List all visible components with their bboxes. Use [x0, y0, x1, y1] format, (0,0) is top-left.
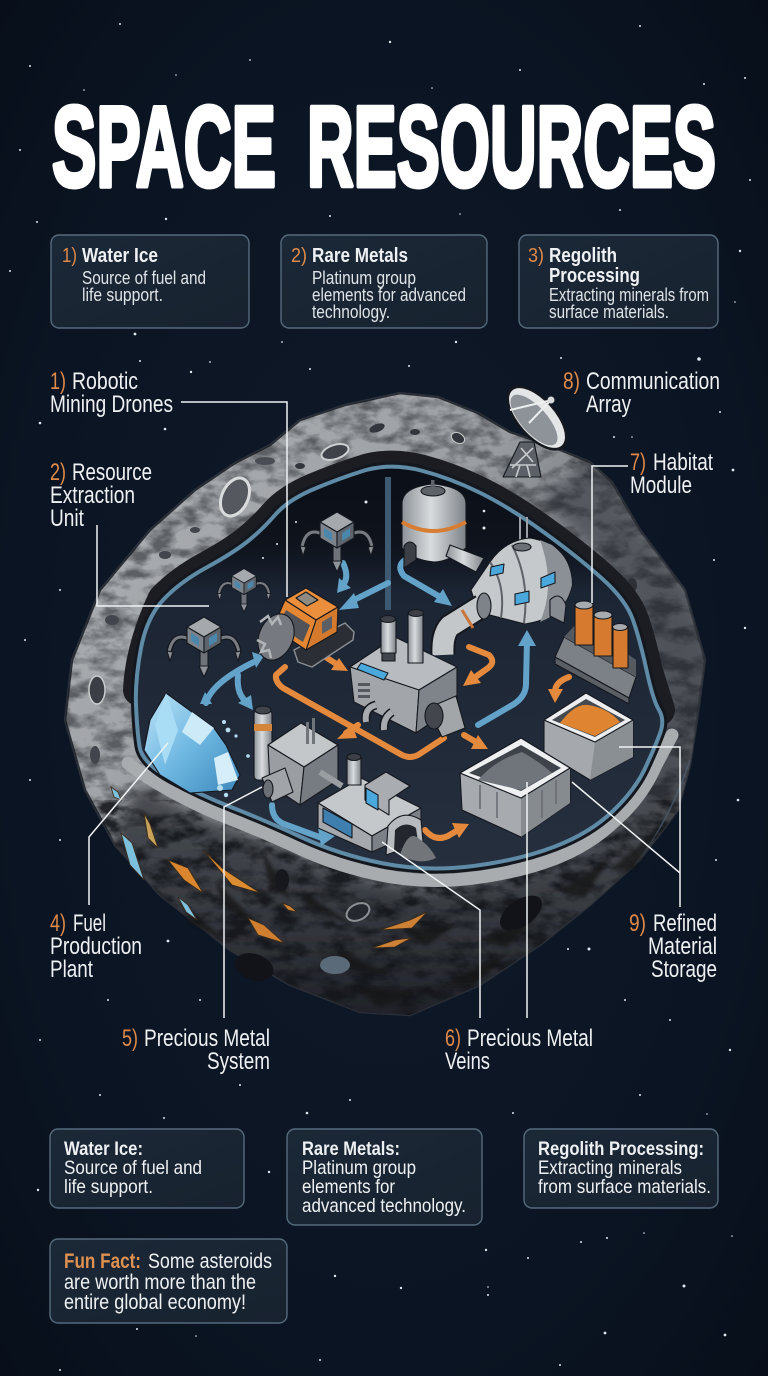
label 1: robotic mining drones: Robotic	[72, 368, 138, 395]
label 4: fuel production plant: Plant	[50, 956, 93, 983]
panel: regolith processing: surface materials.	[549, 302, 669, 322]
arrow: batteries to storage	[548, 677, 569, 703]
arrow: factory loop	[463, 647, 492, 686]
summary card: rare metals: Rare Metals:	[302, 1138, 400, 1160]
arrow: blue to metal plant	[272, 805, 335, 846]
icon: central factory	[350, 610, 465, 737]
leader lines	[89, 402, 680, 1018]
icon: storage tank	[402, 480, 484, 572]
icon: water ice block	[144, 693, 250, 797]
arrow: blue ice exchange	[200, 652, 264, 710]
icon: drones	[167, 512, 374, 677]
label 6: precious metal veins: Veins	[445, 1048, 490, 1075]
label 2: resource extraction unit: 2)	[50, 459, 66, 486]
asteroid shading	[60, 390, 720, 1030]
title: SPACE	[52, 84, 276, 211]
panel: rare metals: Platinum group	[312, 268, 416, 288]
icon: gray storage bin	[460, 738, 570, 837]
panel: water ice: 1)	[62, 245, 77, 267]
callout: fun fact	[50, 1239, 287, 1323]
panel: regolith processing	[519, 235, 718, 328]
panel: rare metals: elements for advanced	[312, 285, 466, 305]
summary card: water ice	[50, 1129, 244, 1208]
label 7: habitat module: 7)	[630, 449, 646, 476]
icon: fuel production plant	[254, 706, 338, 805]
label 7: habitat module: Module	[630, 472, 692, 499]
label 8: communication array: 8)	[563, 368, 580, 395]
summary card: regolith processing: Regolith Processing:	[538, 1138, 704, 1160]
panel: regolith processing: Regolith	[549, 245, 617, 267]
label 9: refined material storage: 9)	[629, 910, 646, 937]
summary card: regolith processing: Extracting minerals	[538, 1157, 682, 1179]
icon: battery bank	[555, 601, 636, 704]
label 7: habitat module: Habitat	[653, 449, 713, 476]
arrow: excavator to factory	[327, 658, 348, 671]
summary card: rare metals: advanced technology.	[302, 1195, 466, 1217]
label 2: resource extraction unit: Resource	[72, 459, 152, 486]
summary card: regolith processing	[524, 1129, 718, 1208]
icon: orange storage bin	[544, 693, 633, 780]
panel: rare metals	[281, 235, 487, 328]
arrow: orange main circuit	[276, 667, 444, 757]
label 9: refined material storage: Storage	[651, 956, 717, 983]
label 4: fuel production plant	[50, 910, 142, 983]
label 1: robotic mining drones: 1)	[50, 368, 66, 395]
panel: water ice	[51, 235, 249, 328]
asteroid outer rock	[65, 393, 705, 1015]
label 6: precious metal veins: 6)	[445, 1025, 461, 1052]
title	[52, 84, 716, 211]
label 6: precious metal veins: Precious Metal	[467, 1025, 593, 1052]
panel: rare metals: 2)	[291, 245, 307, 267]
callout: fun fact: Some asteroids	[148, 1250, 272, 1273]
label 4: fuel production plant: 4)	[50, 910, 66, 937]
label 5: precious metal system: System	[207, 1048, 270, 1075]
label 9: refined material storage	[629, 910, 717, 983]
craters	[89, 422, 665, 986]
arrow: factory to gray bin	[464, 735, 488, 749]
label 4: fuel production plant: Fuel	[73, 910, 106, 937]
summary card: water ice: Source of fuel and	[64, 1157, 202, 1179]
summary card: rare metals: Platinum group	[302, 1157, 416, 1179]
icon: precious metal plant	[318, 754, 436, 861]
arrow: metal plant to bin	[425, 823, 469, 838]
summary card: rare metals	[287, 1129, 482, 1225]
panel: rare metals: Rare Metals	[312, 245, 408, 267]
label 1: robotic mining drones: Mining Drones	[50, 391, 173, 418]
label 2: resource extraction unit: Unit	[50, 505, 84, 532]
summary card: regolith processing: from surface materials.	[538, 1176, 711, 1198]
label 9: refined material storage: Material	[648, 933, 717, 960]
dark streaks	[180, 828, 660, 1007]
icon: satellite dish	[495, 375, 579, 477]
label 8: communication array	[563, 368, 720, 418]
arrow: blue up to habitat	[478, 630, 536, 725]
panel: regolith processing: 3)	[528, 245, 544, 267]
icon: elbow pipe	[443, 593, 491, 655]
arrow: drone down	[337, 563, 351, 593]
panel: rare metals: technology.	[312, 302, 390, 322]
label 5: precious metal system	[122, 1025, 270, 1075]
icon: habitat module	[471, 517, 572, 624]
flow line: central blue conduit	[339, 477, 388, 610]
panel: water ice: Water Ice	[82, 245, 158, 267]
callout: fun fact: Fun Fact:	[64, 1250, 141, 1273]
panel: water ice: life support.	[82, 285, 163, 305]
summary card: water ice: Water Ice:	[64, 1138, 143, 1160]
label 5: precious metal system: Precious Metal	[144, 1025, 270, 1052]
callout: fun fact: are worth more than the	[64, 1271, 256, 1294]
icon: excavator	[251, 588, 354, 667]
summary card: water ice: life support.	[64, 1176, 153, 1198]
panel: regolith processing: Extracting minerals from	[549, 285, 709, 305]
asteroid cutaway	[60, 390, 720, 1030]
arrow: tank to habitat	[400, 560, 452, 606]
label 4: fuel production plant: Production	[50, 933, 142, 960]
cavity outline and floor	[136, 467, 662, 868]
stars inside cavity	[262, 500, 486, 559]
cavity rim ledge	[128, 735, 672, 880]
label 8: communication array: Communication	[586, 368, 720, 395]
label 9: refined material storage: Refined	[653, 910, 717, 937]
label 1: robotic mining drones	[50, 368, 173, 418]
label 8: communication array: Array	[586, 391, 631, 418]
summary card: rare metals: elements for	[302, 1176, 395, 1198]
label 7: habitat module	[630, 449, 713, 499]
label 2: resource extraction unit	[50, 459, 152, 532]
upper wall section band	[139, 467, 659, 710]
callout: fun fact: entire global economy!	[64, 1291, 246, 1314]
label 5: precious metal system: 5)	[122, 1025, 138, 1052]
mineral veins	[111, 787, 427, 948]
panel: regolith processing: Processing	[549, 265, 640, 287]
label 6: precious metal veins	[445, 1025, 593, 1075]
label 2: resource extraction unit: Extraction	[50, 482, 135, 509]
panel: water ice: Source of fuel and	[82, 268, 206, 288]
